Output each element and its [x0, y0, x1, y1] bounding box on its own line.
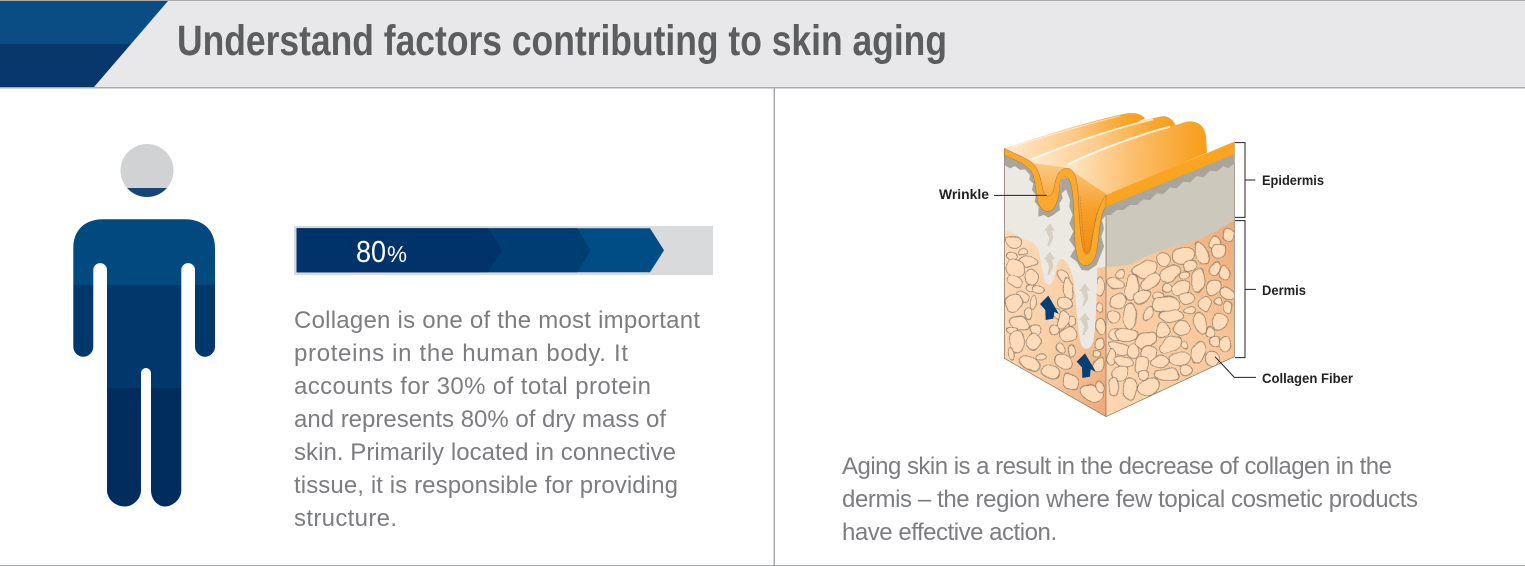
label: dermis: Dermis — [1262, 282, 1306, 298]
right epidermis tan layer — [1106, 155, 1234, 267]
progress value: 80 — [356, 234, 386, 269]
left face dermis — [1004, 155, 1106, 417]
header band — [0, 0, 1525, 88]
progress bar 80% — [294, 226, 713, 275]
icon: navy upward arrows — [1040, 296, 1096, 378]
bottom rule — [0, 565, 1525, 566]
text block: aging skin: have effective action. — [842, 519, 1057, 546]
dashed fold detail — [1080, 197, 1097, 253]
icon: human figure 80 percent filled — [73, 144, 215, 506]
orange layer with wrinkle folds, left — [1004, 148, 1106, 266]
light collagen arrows — [1044, 223, 1090, 335]
text block: collagen description: and represents 80% of dry mass of — [294, 406, 666, 433]
text block: collagen description: structure. — [294, 505, 397, 532]
text block: aging skin — [842, 453, 1418, 546]
label: epidermis: Epidermis — [1262, 172, 1324, 188]
text block: aging skin: Aging skin is a result in the decrease of collagen in the — [842, 453, 1392, 480]
wrinkle ridges on top surface — [1004, 113, 1207, 257]
label: collagen fiber: Collagen Fiber — [1262, 370, 1354, 386]
wrinkle valley surfaces — [1033, 163, 1107, 254]
dermis bracket — [1235, 221, 1256, 358]
skin cross-section diagram — [994, 113, 1256, 417]
text block: collagen description — [294, 307, 700, 532]
collagen fibers — [1002, 228, 1235, 405]
block outline edges — [1004, 142, 1234, 417]
text block: collagen description: skin. Primarily located in connective — [294, 439, 676, 466]
title: Understand factors contributing to skin aging — [177, 17, 947, 65]
grey basal layer, left — [1004, 155, 1106, 271]
orange layer, right — [1106, 142, 1234, 207]
epidermis bracket — [1235, 143, 1255, 217]
text block: collagen description: proteins in the human body. It — [294, 340, 628, 367]
wrinkle leader line — [994, 194, 1047, 197]
text block: collagen description: Collagen is one of the most important — [294, 307, 700, 334]
text block: collagen description: accounts for 30% of total protein — [294, 373, 651, 400]
text block: aging skin: dermis – the region where few topical cosmetic products — [842, 486, 1418, 513]
header blue slanted block — [0, 1, 168, 87]
right face dermis — [1106, 217, 1234, 417]
column divider — [774, 88, 775, 566]
collagen leader line — [1215, 357, 1256, 377]
label: wrinkle: Wrinkle — [939, 186, 989, 202]
grey basal layer, right — [1106, 150, 1234, 215]
text block: collagen description: tissue, it is responsible for providing — [294, 472, 678, 499]
progress value: % — [387, 241, 407, 267]
left epidermis pale layer — [1004, 160, 1106, 349]
